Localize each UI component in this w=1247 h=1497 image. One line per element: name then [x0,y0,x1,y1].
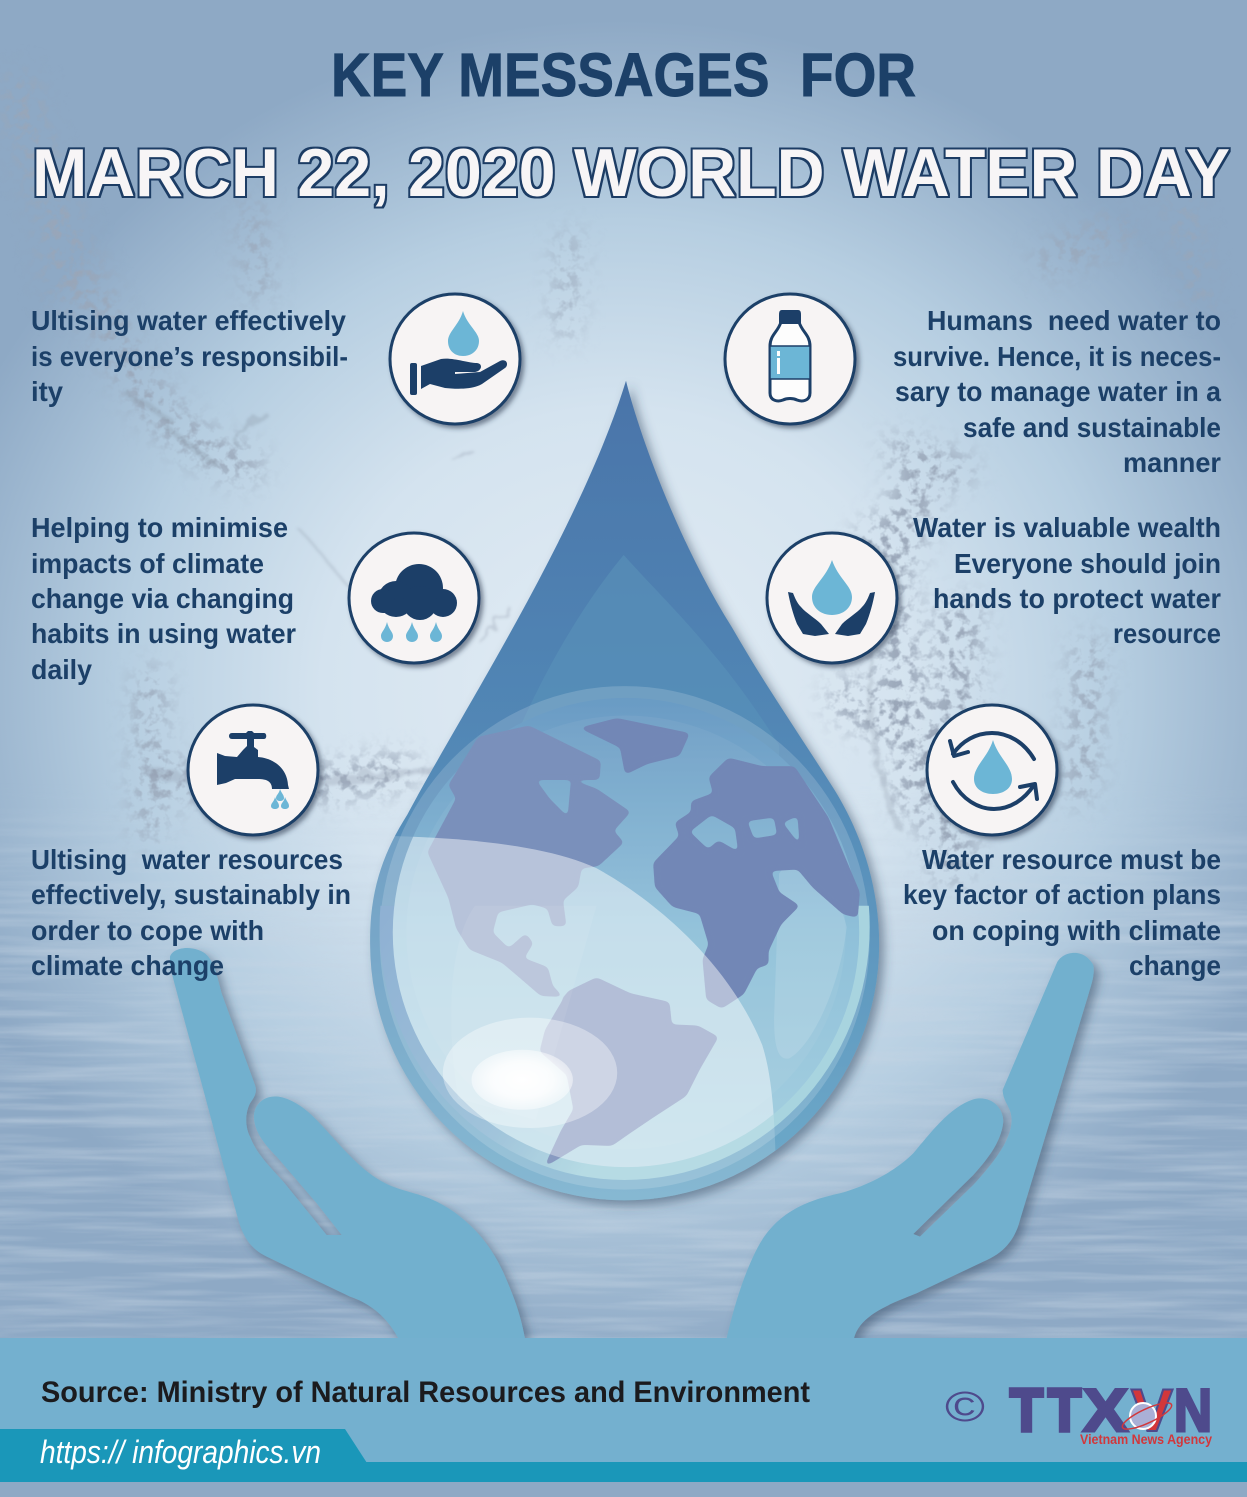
heading line 1: KEY MESSAGES FOR [331,41,916,109]
title [32,41,1230,211]
icon: water bottle [725,294,855,424]
light reflection [360,836,776,1206]
message 2: daily [31,654,92,685]
message 5 [913,512,1221,649]
copyright mark: © [945,1383,985,1431]
logo: TTXVN [945,1377,1212,1447]
logo: TTXVN: T [1048,1377,1081,1444]
message 3: order to cope with [31,915,264,946]
icon: water cycle arrows [927,705,1057,835]
message 4: sary to manage water in a [895,376,1221,407]
logo: TTXVN: V [1131,1377,1173,1444]
message 2: impacts of climate [31,548,264,579]
message 5: hands to protect water [933,583,1221,614]
message 6: on coping with climate [932,915,1221,946]
globe and reflections [360,555,870,1206]
continent: Europe and Africa [653,758,860,1009]
logo: TTXVN: X [1083,1377,1128,1444]
highlight [443,1018,617,1128]
drop body [370,381,879,1200]
panel: right messages [893,305,1221,981]
icon: water tap [188,705,318,835]
icon: hand holding drop [390,294,520,424]
source text: Source: Ministry of Natural Resources and Environment [41,1376,810,1409]
message 4 [893,305,1221,478]
url text: https:// infographics.vn [40,1434,321,1470]
message 6 [903,844,1221,981]
message 3: climate change [31,950,224,981]
left hand [170,948,525,1338]
panel: footer [0,1338,1247,1482]
message 1: ity [31,376,63,407]
message 4: safe and sustainable [963,412,1221,443]
message 6: change [1129,950,1221,981]
continent: South America [540,977,718,1167]
message 3: Ultising water resources [31,844,343,875]
logo: TTXVN: Vietnam News Agency [1080,1432,1212,1447]
message 2: habits in using water [31,618,296,649]
message 4: survive. Hence, it is neces- [893,341,1221,372]
message 6: Water resource must be [922,844,1221,875]
message 2: Helping to minimise [31,512,288,543]
right hand [727,953,1094,1338]
message 3 [31,844,351,981]
message 5: Everyone should join [954,548,1221,579]
message 2: change via changing [31,583,294,614]
continent: North America [428,726,630,997]
logo: TTXVN: T [1010,1377,1043,1444]
logo: TTXVN: N [1174,1377,1212,1444]
message 1: Ultising water effectively [31,305,346,336]
message 1 [31,305,348,407]
icon: hands protecting drop [767,533,897,663]
message 3: effectively, sustainably in [31,879,351,910]
panel: left messages [31,305,351,981]
continent: Greenland [580,718,690,774]
message 1: is everyone’s responsibil- [31,341,348,372]
water drop with globe [360,381,879,1206]
message 4: Humans need water to [927,305,1221,336]
message 2 [31,512,296,685]
icon: rain cloud [349,533,479,663]
message 5: Water is valuable wealth [913,512,1221,543]
message 6: key factor of action plans [903,879,1221,910]
url tab [0,1429,367,1482]
message 4: manner [1123,447,1221,478]
continents [428,718,860,1167]
message 5: resource [1113,618,1221,649]
heading line 2: MARCH 22, 2020 WORLD WATER DAY [32,135,1230,211]
